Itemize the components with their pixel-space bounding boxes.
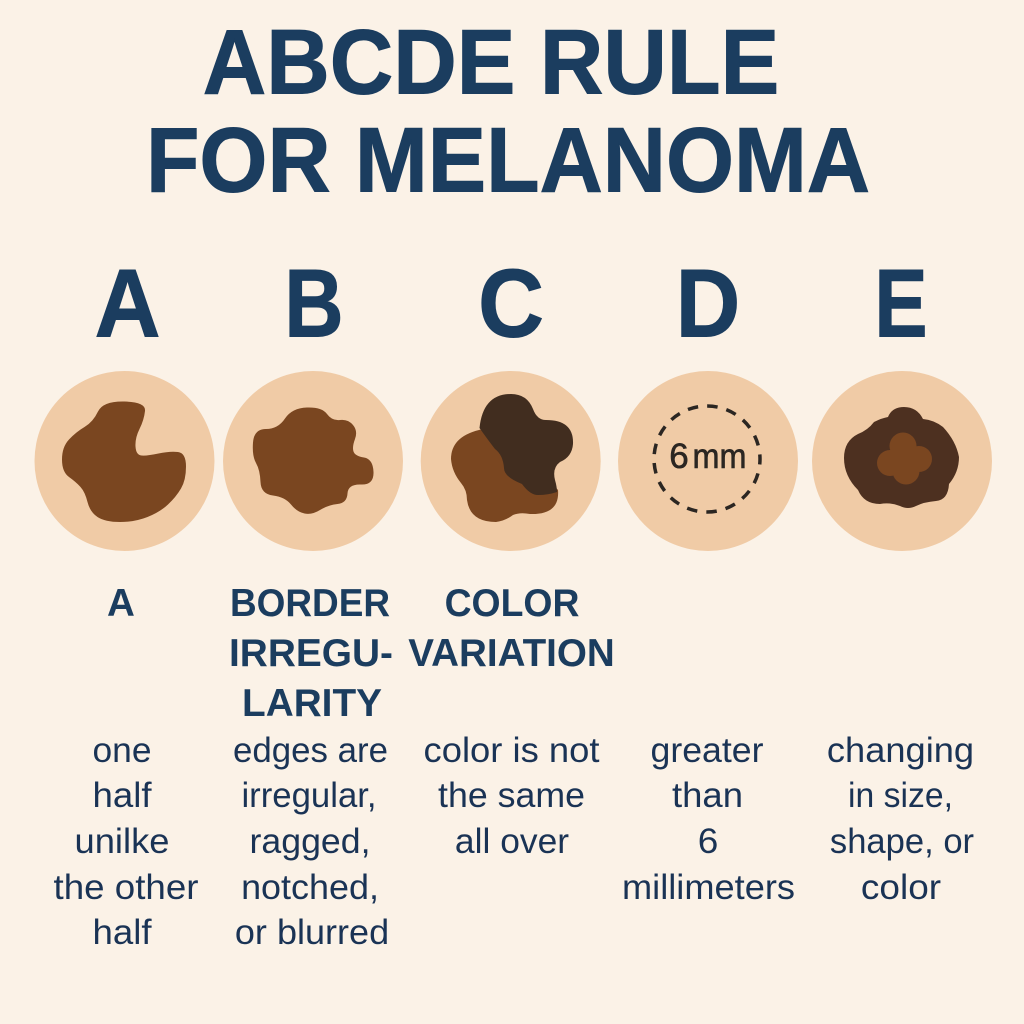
heading A: A bbox=[107, 582, 135, 625]
description B: edges are bbox=[233, 731, 388, 770]
description C: all over bbox=[455, 822, 569, 861]
description D bbox=[622, 731, 795, 907]
icon: asymmetrical mole bbox=[34, 371, 214, 551]
description D: greater bbox=[651, 731, 764, 770]
description E: color bbox=[861, 867, 941, 907]
icon: 6mm dashed circle: 6 bbox=[669, 437, 689, 476]
description E: in size, bbox=[848, 776, 953, 815]
heading C: VARIATION bbox=[408, 632, 615, 675]
title: ABCDE RULE bbox=[203, 12, 779, 114]
description B: notched, bbox=[241, 867, 379, 907]
panel: diameter bbox=[618, 249, 798, 907]
large letter C: C bbox=[478, 249, 544, 357]
description D: 6 bbox=[698, 821, 718, 861]
heading B: BORDER bbox=[230, 582, 390, 625]
description D: millimeters bbox=[622, 868, 795, 907]
description E: shape, or bbox=[830, 823, 974, 861]
description B: or blurred bbox=[235, 912, 389, 952]
description A bbox=[53, 731, 199, 952]
large letter B: B bbox=[284, 250, 344, 358]
panel: border bbox=[223, 250, 403, 952]
description D: than bbox=[672, 776, 743, 815]
heading B: IRREGU- bbox=[229, 632, 393, 675]
description C bbox=[424, 731, 600, 861]
icon: two-tone mole bbox=[421, 371, 601, 551]
icon: multi-shade mole bbox=[812, 371, 992, 551]
description E: changing bbox=[827, 731, 974, 770]
description B bbox=[233, 731, 389, 952]
heading C bbox=[408, 581, 615, 675]
panel: evolving bbox=[812, 249, 992, 907]
description B: irregular, bbox=[241, 776, 377, 815]
heading C: COLOR bbox=[445, 581, 579, 625]
description A: unilke bbox=[75, 822, 169, 861]
description C: the same bbox=[438, 776, 585, 815]
description C: color is not bbox=[424, 731, 600, 770]
description A: half bbox=[92, 776, 152, 815]
large letter A: A bbox=[95, 249, 160, 357]
heading B bbox=[229, 582, 393, 725]
icon: 6mm dashed circle bbox=[618, 371, 798, 551]
icon: irregular border mole bbox=[223, 371, 403, 551]
description A: one bbox=[92, 731, 152, 770]
title bbox=[146, 12, 870, 212]
large letter D: D bbox=[676, 249, 740, 357]
large letter E: E bbox=[874, 249, 928, 357]
description B: ragged, bbox=[250, 822, 370, 861]
heading B: LARITY bbox=[242, 682, 382, 725]
panel: color bbox=[408, 249, 615, 861]
description A: half bbox=[92, 913, 152, 952]
description A: the other bbox=[53, 868, 199, 907]
panel: asymmetry bbox=[34, 249, 214, 952]
title: FOR MELANOMA bbox=[146, 110, 870, 212]
icon: 6mm dashed circle: mm bbox=[693, 437, 746, 476]
description E bbox=[827, 731, 974, 907]
